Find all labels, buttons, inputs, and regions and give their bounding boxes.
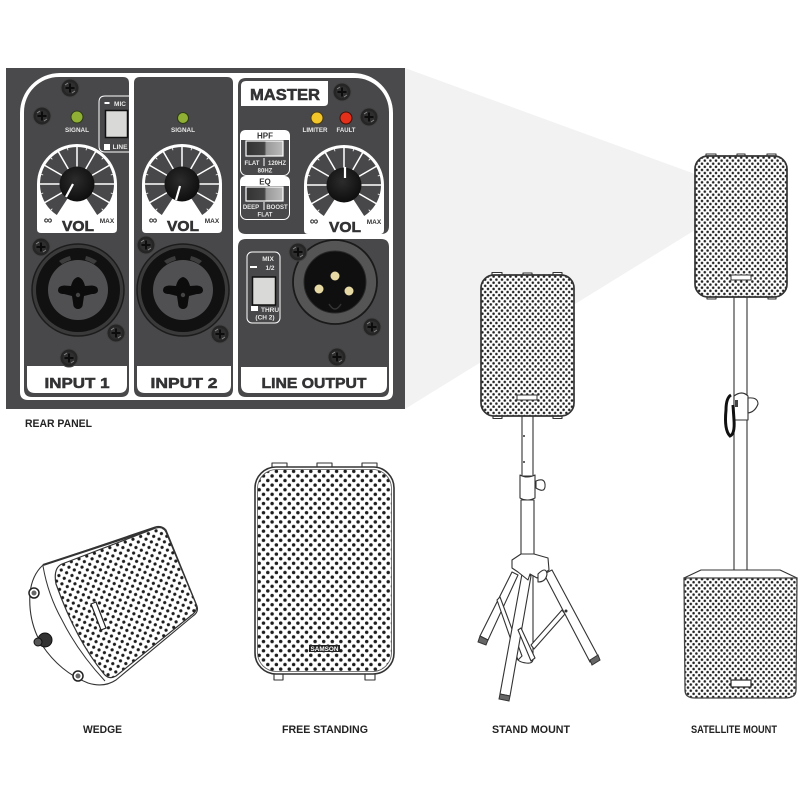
volume dial: master: ∞ — [310, 214, 318, 228]
illustration: wedge speaker — [29, 526, 198, 685]
mix thru switch: (CH 2) — [255, 314, 275, 322]
fault LED — [340, 112, 352, 124]
input 2 label: INPUT 2 — [150, 375, 218, 392]
subwoofer — [684, 570, 797, 698]
panel: line output — [238, 239, 389, 397]
satellite mount caption: SATELLITE MOUNT — [691, 724, 777, 736]
panel screws — [32, 79, 381, 367]
combo jack: input 2 — [137, 244, 229, 336]
wedge badge — [91, 602, 106, 630]
signal label: SIGNAL — [65, 127, 89, 134]
wedge caption: WEDGE — [83, 724, 122, 736]
HPF switch: FLAT — [245, 161, 260, 167]
HPF switch: HPF — [257, 132, 273, 140]
HPF switch — [240, 130, 290, 176]
illustration: free standing speaker — [255, 463, 394, 680]
volume dial: input 1 — [37, 144, 117, 235]
HPF switch: 120HZ — [268, 161, 286, 167]
master heading — [241, 81, 328, 106]
stand mount caption: STAND MOUNT — [492, 724, 570, 736]
signal LED — [178, 112, 188, 124]
signal LED — [71, 111, 83, 123]
mix thru switch — [247, 252, 280, 323]
mic line switch: LINE — [113, 144, 128, 151]
volume dial: input 1: VOL — [62, 218, 94, 235]
mix thru switch: 1/2 — [265, 265, 275, 272]
HPF switch: 80HZ — [258, 168, 273, 174]
input 1 label — [27, 366, 127, 393]
XLR connector — [293, 240, 377, 324]
panel: input 2 — [134, 77, 233, 397]
mix thru switch: THRU — [261, 307, 279, 314]
panel: input 1 — [24, 77, 129, 397]
master heading: MASTER — [250, 87, 320, 104]
volume dial: master: MAX — [367, 219, 382, 226]
speaker on stand — [481, 272, 574, 418]
illustration: satellite mount — [684, 154, 797, 698]
volume dial: input 2: ∞ — [149, 213, 157, 227]
mic line switch — [99, 96, 129, 152]
speaker on pole — [695, 154, 787, 299]
free standing caption: FREE STANDING — [282, 724, 368, 736]
volume dial: input 2: MAX — [205, 218, 220, 225]
input 1 label: INPUT 1 — [44, 375, 110, 392]
rear panel caption: REAR PANEL — [25, 418, 92, 430]
illustration: stand mount — [478, 272, 600, 701]
limiter LED — [311, 112, 323, 124]
callout cone from satellite speaker to rear panel — [405, 68, 695, 409]
input 2 label — [137, 366, 231, 393]
EQ switch: BOOST — [266, 205, 288, 211]
volume dial: input 2: VOL — [167, 218, 199, 235]
panel: rear panel — [6, 68, 405, 409]
pole — [734, 297, 747, 573]
volume dial: input 2 — [142, 144, 222, 235]
samson badge: SAMSON — [310, 647, 338, 653]
pole clamp and strap — [726, 393, 758, 436]
signal label: SIGNAL — [171, 127, 195, 134]
panel: master — [238, 78, 389, 236]
limiter label: LIMITER — [302, 127, 328, 134]
volume dial: master: VOL — [329, 219, 361, 236]
EQ switch: DEEP — [243, 205, 259, 211]
wedge side feet — [29, 588, 83, 681]
volume dial: input 1: MAX — [100, 218, 115, 225]
mic line switch: MIC — [114, 101, 126, 108]
combo jack: input 1 — [32, 244, 124, 336]
volume dial: master — [304, 145, 384, 236]
volume dial: input 1: ∞ — [44, 213, 52, 227]
EQ switch: FLAT — [258, 212, 273, 218]
mix thru switch: MIX — [262, 256, 274, 263]
line output label: LINE OUTPUT — [262, 375, 366, 392]
EQ switch — [240, 176, 290, 220]
line output label — [241, 367, 387, 393]
samson badge — [309, 645, 340, 653]
tripod stand — [478, 416, 600, 701]
EQ switch: EQ — [259, 178, 271, 186]
fault label: FAULT — [336, 127, 356, 134]
